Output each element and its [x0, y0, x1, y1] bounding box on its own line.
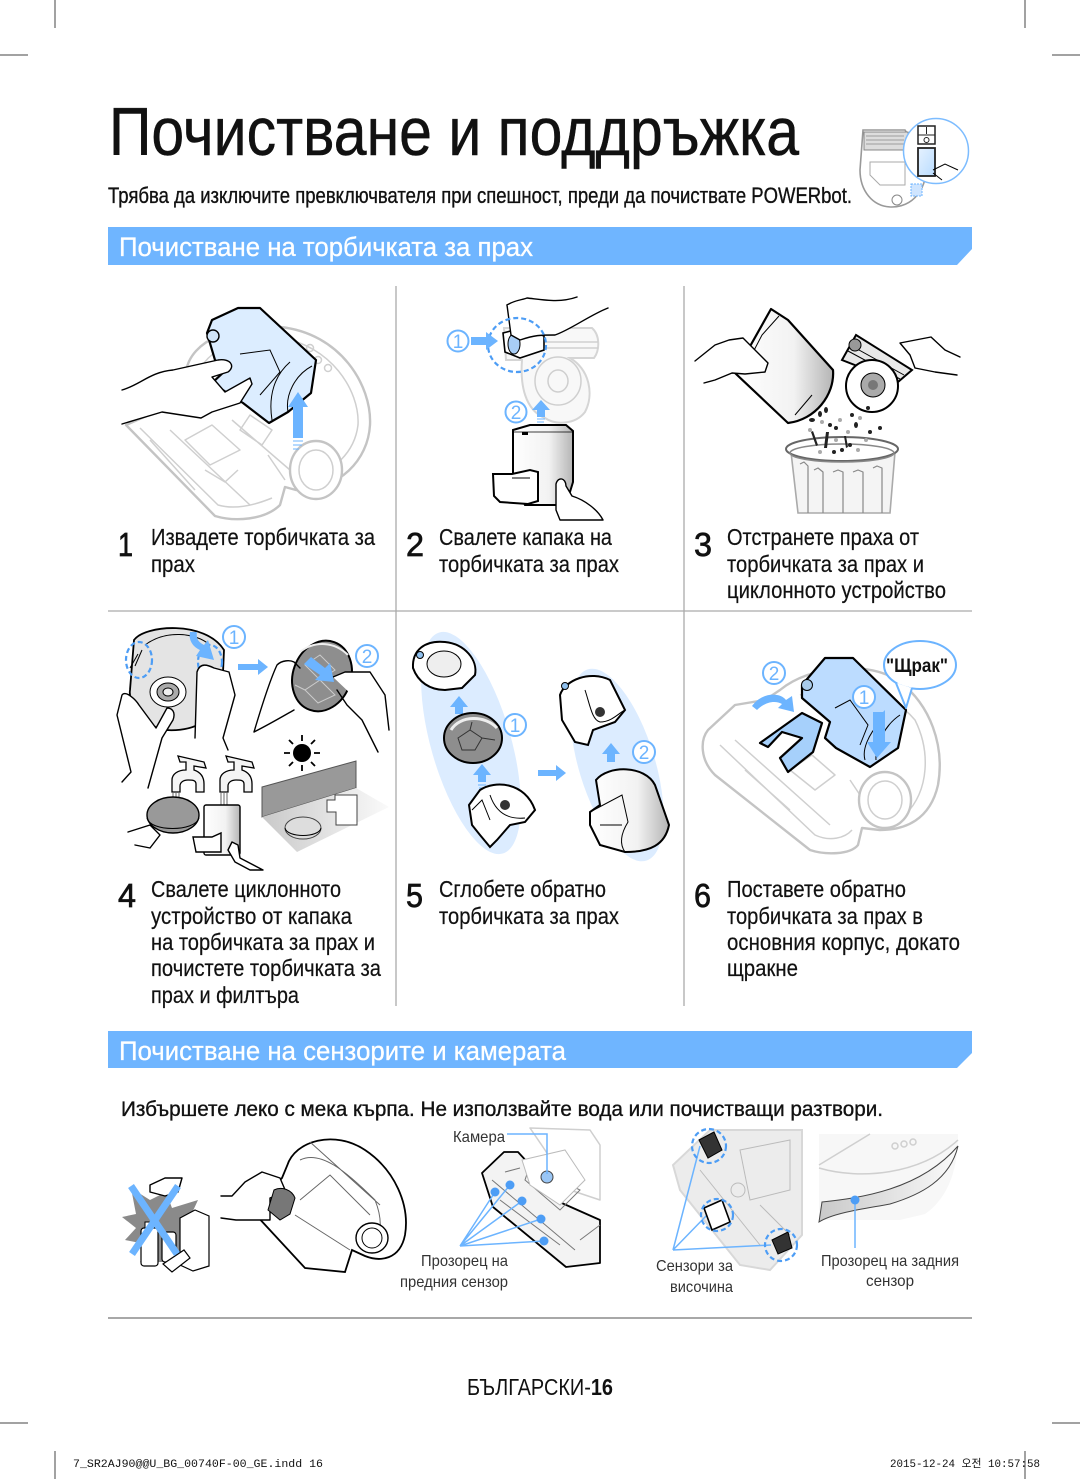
step 5 text	[439, 876, 619, 929]
step 4 text: Свалете циклонното	[151, 876, 341, 902]
faucets	[172, 756, 254, 820]
label: cliff sensors: Сензори за	[656, 1258, 733, 1275]
step 4 text: устройство от капака	[151, 903, 352, 929]
step 2 text	[439, 524, 619, 577]
illustration: separating, washing and drying parts: 2	[362, 647, 372, 668]
step 6 text	[727, 876, 960, 981]
illustration: removing the bin cover: 2	[511, 403, 521, 424]
illustration: reinserting the dust bin: 2	[769, 664, 779, 685]
panel: step 5	[401, 621, 683, 929]
illustration: reassembling the dust bin: 2	[639, 743, 649, 764]
subtitle warning text: Трябва да изключите превключвателя при спешност, преди да почиствате POWERbot.	[108, 183, 852, 208]
step 5 text: Сглобете обратно	[439, 876, 606, 902]
icon: emergency switch on robot underside	[860, 118, 968, 207]
label: rear sensor window: сензор	[866, 1273, 914, 1290]
step number 5: 5	[406, 877, 423, 914]
step 4 text: на торбичката за прах и	[151, 929, 375, 955]
illustration: reassembling the dust bin: 1	[510, 716, 520, 737]
step 2 text: торбичката за прах	[439, 551, 619, 577]
panel: step 1	[118, 308, 375, 577]
label: rear sensor window	[821, 1253, 959, 1290]
label: front sensor window: Прозорец на	[421, 1253, 508, 1270]
illustration: wiping the robot sensor	[221, 1139, 406, 1272]
illustration: reinserting the dust bin: 1	[859, 688, 869, 709]
label: rear sensor window: Прозорец на задния	[821, 1253, 959, 1270]
label: cliff sensors	[656, 1258, 733, 1296]
step 3 text: Отстранете праха от	[727, 524, 919, 550]
step number 6: 6	[694, 877, 711, 914]
print slug right: 2015-12-24 오전 10:57:58	[890, 1457, 1040, 1471]
page number: БЪЛГАРСКИ-16	[467, 1374, 613, 1400]
step number 4: 4	[118, 877, 136, 914]
label: camera: Камера	[453, 1129, 505, 1146]
instruction text: Избършете леко с мека кърпа. Не използвайте вода или почистващи разтвори.	[121, 1098, 883, 1121]
illustration: reinserting the dust bin: "Щрак"	[886, 656, 948, 677]
illustration: camera and front sensor windows	[400, 1128, 600, 1291]
step 3 text: торбичката за прах и	[727, 551, 924, 577]
step 1 text: прах	[151, 551, 195, 577]
section header: sensors and camera	[108, 1031, 972, 1068]
icon: no chemicals warning	[122, 1178, 209, 1272]
step 5 text: торбичката за прах	[439, 903, 619, 929]
label: front sensor window	[400, 1253, 508, 1291]
step number 1: 1	[118, 526, 133, 563]
panel: step 4	[117, 626, 389, 1008]
illustration: separating, washing and drying parts: 1	[229, 628, 239, 649]
step 4 text: почистете торбичката за	[151, 955, 381, 981]
illustration: cliff sensors	[656, 1129, 802, 1296]
illustration: removing the bin cover: 1	[453, 332, 463, 353]
title: Почистване и поддръжка	[109, 94, 799, 170]
step 1 text: Извадете торбичката за	[151, 524, 375, 550]
label: cliff sensors: височина	[670, 1279, 733, 1296]
panel: step 6	[694, 641, 960, 981]
step 3 text: циклонното устройство	[727, 577, 946, 603]
step 1 text	[151, 524, 375, 577]
section header: dust bin cleaning	[108, 227, 972, 265]
step 3 text	[727, 524, 946, 603]
illustration: reinserting the dust bin	[703, 641, 956, 853]
label: front sensor window: предния сензор	[400, 1274, 508, 1291]
step 4 text: прах и филтъра	[151, 982, 299, 1008]
step 6 text: Поставете обратно	[727, 876, 906, 902]
step number 2: 2	[406, 526, 424, 563]
illustration: separating, washing and drying parts	[117, 626, 389, 870]
illustration: removing the bin cover	[448, 297, 608, 520]
illustration: rear sensor window	[819, 1134, 959, 1290]
step 6 text: основния корпус, докато	[727, 929, 960, 955]
step 4 text	[151, 876, 381, 1008]
step 2 text: Свалете капака на	[439, 524, 612, 550]
panel: step 2	[406, 297, 619, 577]
illustration: pulling dust bin out of robot	[122, 308, 370, 519]
panel: step 3	[694, 309, 960, 603]
section header: dust bin cleaning: Почистване на торбичката за прах	[119, 232, 533, 262]
step 6 text: торбичката за прах в	[727, 903, 923, 929]
section header: sensors and camera: Почистване на сензорите и камерата	[119, 1036, 567, 1066]
print slug left: 7_SR2AJ90@@U_BG_00740F-00_GE.indd 16	[73, 1459, 323, 1471]
illustration: emptying dust into a bin	[695, 309, 960, 513]
step number 3: 3	[694, 526, 712, 563]
step 6 text: щракне	[727, 955, 798, 981]
illustration: reassembling the dust bin	[401, 621, 683, 872]
